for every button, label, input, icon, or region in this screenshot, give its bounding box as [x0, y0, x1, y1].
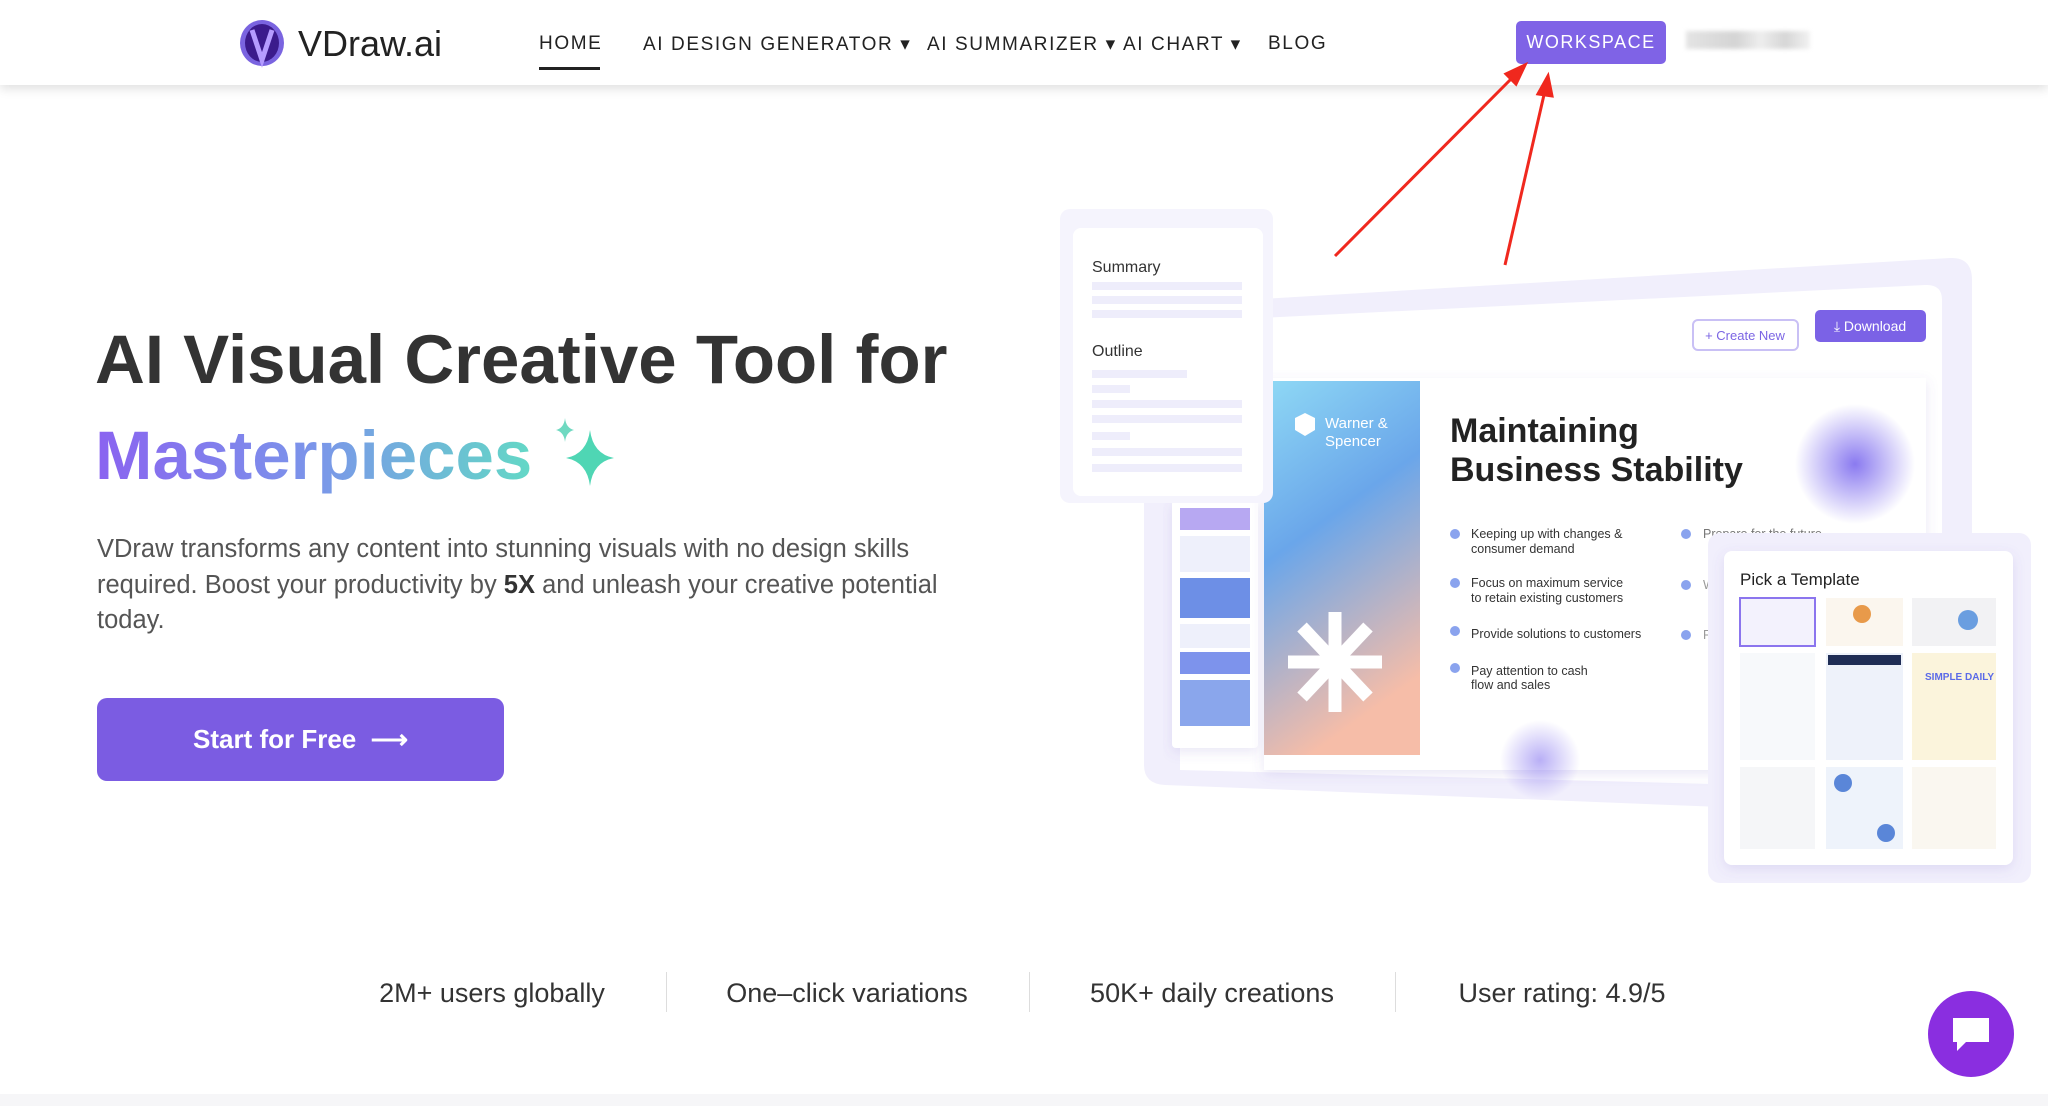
- slide: [1264, 378, 1926, 800]
- logo: [240, 20, 442, 68]
- summary card: Outline: [1092, 343, 1143, 360]
- slide: Warner &: [1325, 415, 1388, 432]
- workspace button: [1516, 21, 1666, 64]
- logo: VDraw.ai: [298, 23, 442, 64]
- nav links: AI DESIGN GENERATOR ▾: [643, 34, 911, 55]
- bottom strip: [0, 1094, 2048, 1106]
- icon: sparkle: [556, 418, 614, 486]
- slide: Pay attention to cash: [1471, 664, 1588, 678]
- nav links: AI CHART ▾: [1123, 34, 1242, 55]
- summary card: Summary: [1092, 259, 1160, 276]
- stats row: 2M+ users globally: [379, 978, 605, 1008]
- create new / download buttons: + Create New: [1705, 328, 1786, 343]
- CTA button: Start for Free ⟶: [193, 724, 408, 754]
- nav links: [539, 33, 1327, 70]
- slide: Spencer: [1325, 433, 1381, 450]
- stats row: One–click variations: [726, 978, 968, 1008]
- pick a template card: Pick a Template: [1740, 570, 1860, 589]
- illustration: product mockup: [1060, 62, 2031, 883]
- slide: Focus on maximum service: [1471, 576, 1623, 590]
- hero heading: [95, 321, 948, 494]
- slide: Pr: [1703, 628, 1716, 642]
- create new / download buttons: ⤓ Download: [1834, 318, 1906, 334]
- slide: Maintaining: [1450, 412, 1639, 450]
- stats row: User rating: 4.9/5: [1458, 978, 1666, 1008]
- slide: Prepare for the future: [1703, 527, 1822, 541]
- slide: W: [1703, 578, 1715, 592]
- nav links: BLOG: [1268, 33, 1327, 54]
- pick a template card: [1708, 533, 2031, 883]
- outer lavender panel: [1144, 258, 1972, 816]
- blurred user area: [1686, 31, 1810, 49]
- workspace button: WORKSPACE: [1526, 32, 1656, 52]
- hero heading: Masterpieces: [95, 417, 532, 494]
- slide: flow and sales: [1471, 678, 1550, 692]
- slide: to retain existing customers: [1471, 591, 1623, 605]
- pick a template card: SIMPLE DAILY: [1925, 672, 1994, 683]
- slide: consumer demand: [1471, 542, 1575, 556]
- nav links: AI SUMMARIZER ▾: [927, 34, 1117, 55]
- summary card: [1060, 209, 1273, 503]
- hero heading: AI Visual Creative Tool for: [95, 321, 948, 398]
- arrows: red pointers to workspace: [1335, 65, 1552, 265]
- stats row: 50K+ daily creations: [1090, 978, 1334, 1008]
- hero description: VDraw transforms any content into stunning visuals with no design skills required. Boost your productivity by 5X and unleash your creative potential today.: [97, 535, 938, 634]
- navigation bar: [0, 0, 2048, 85]
- slide: Keeping up with changes &: [1471, 527, 1623, 541]
- icon: chat bubble: [1928, 991, 2014, 1077]
- slide: Business Stability: [1450, 451, 1743, 489]
- CTA button: [97, 698, 504, 781]
- slide: Provide solutions to customers: [1471, 627, 1641, 641]
- nav links: HOME: [539, 33, 602, 54]
- thumbnail strip: [1172, 500, 1258, 748]
- stats row: [379, 972, 1666, 1012]
- create new / download buttons: [1693, 310, 1926, 350]
